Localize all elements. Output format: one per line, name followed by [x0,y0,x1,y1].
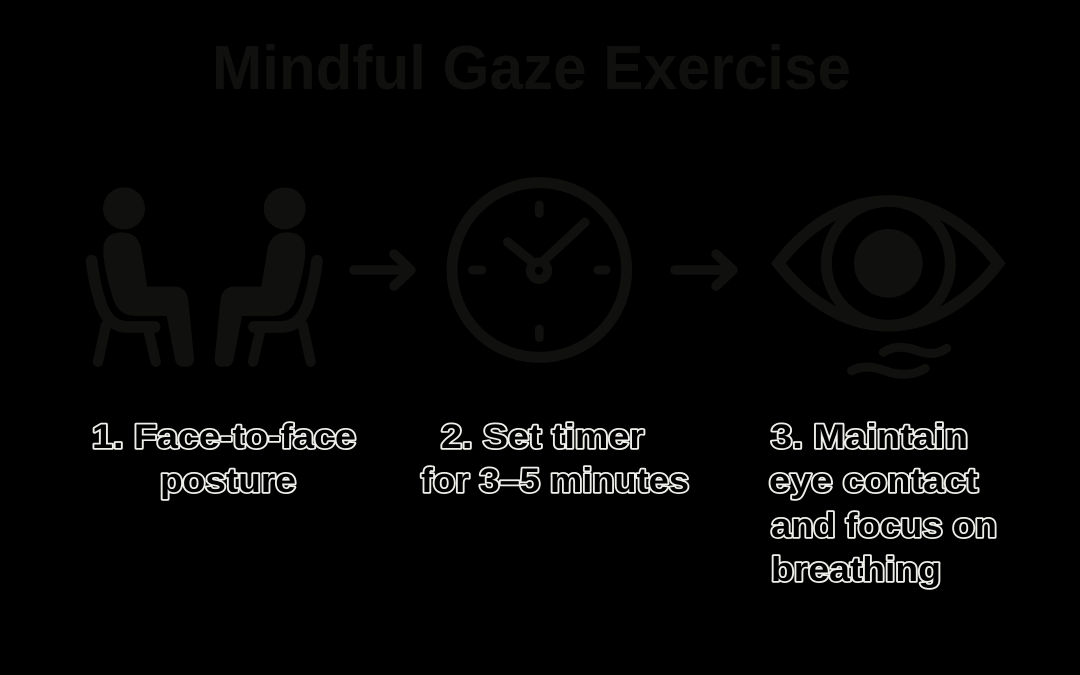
left person and chair [92,187,194,367]
iris ring [826,201,950,325]
step 3 label [769,418,997,589]
hour ticks [472,205,606,338]
centre hub [530,262,548,279]
icon: clock [452,183,627,357]
step 3 label: and focus on [771,507,997,545]
step 2 label: for 3–5 minutes [421,462,689,500]
arrow: step 2 to step 3 [675,254,733,286]
step 2 label [421,418,689,500]
arrow: step 1 to step 2 [354,254,411,286]
pupil [854,229,923,298]
step 1 label: 1. Face-to-face [92,418,356,456]
step 1 label [92,418,356,500]
step 3 label: eye contact [769,462,978,500]
step 3 label: 3. Maintain [771,418,968,456]
eye outline [778,201,998,326]
breathing waves [852,347,947,374]
title: Mindful Gaze Exercise [212,34,851,103]
icon: two people seated face to face [92,187,317,367]
clock face ring [452,183,627,357]
clock hands [508,222,585,263]
step 1 label: posture [160,462,296,500]
step 3 label: breathing [771,551,941,589]
right person and chair [215,187,317,367]
step 2 label: 2. Set timer [441,418,644,456]
icon: eye with breathing waves [778,201,998,374]
